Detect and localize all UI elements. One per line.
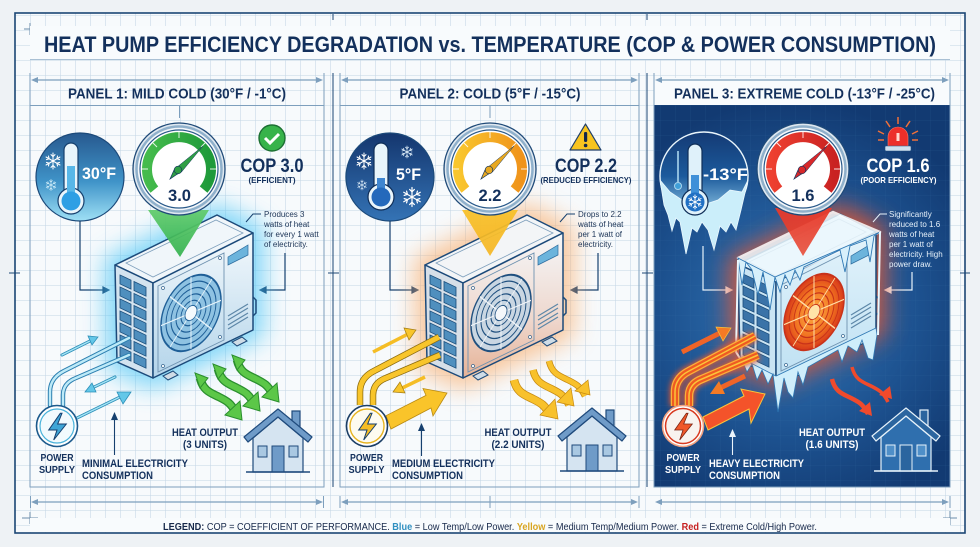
- COP label: COP 2.2: [555, 156, 617, 177]
- note: power draw.: [889, 260, 932, 269]
- consumption label: [392, 423, 496, 482]
- heat output arrows: [195, 355, 279, 420]
- panel 3: extreme cold: [654, 73, 950, 487]
- glow around unit: [115, 215, 253, 378]
- note: Produces 3: [264, 210, 305, 219]
- note: watts of heat: [888, 230, 935, 239]
- gauge 3.0: 3.0: [168, 187, 191, 205]
- panel 2 frame and header: [340, 73, 639, 487]
- bottom dimension lines: [30, 496, 950, 508]
- heat output label: HEAT OUTPUT: [172, 427, 238, 439]
- panel 2: cold: [340, 73, 639, 487]
- gauge beam: [775, 208, 832, 256]
- consumption label: MINIMAL ELECTRICITY: [82, 458, 189, 470]
- note: for every 1 watt: [264, 230, 319, 239]
- icon: house: [558, 408, 626, 471]
- electricity pipes and arrows: [360, 328, 447, 429]
- COP label: (REDUCED EFFICIENCY): [540, 175, 632, 185]
- thermometer badge 30F: 30°F: [82, 165, 116, 183]
- consumption label: HEAVY ELECTRICITY: [709, 458, 805, 470]
- legend: [30, 518, 950, 533]
- consumption label: [82, 412, 189, 482]
- power supply label: [348, 452, 384, 476]
- consumption label: CONSUMPTION: [709, 470, 780, 482]
- thermometer badge 5F: 5°F: [396, 166, 421, 184]
- note: [560, 210, 624, 249]
- power supply icon: [346, 406, 388, 446]
- connector lines to unit: [703, 246, 912, 293]
- icon: warning triangle: [570, 124, 601, 150]
- heat output label: [484, 427, 552, 451]
- consumption label: MEDIUM ELECTRICITY: [392, 458, 496, 470]
- panel 3 background: [654, 73, 950, 487]
- heat output arrows: [832, 367, 892, 416]
- heat output label: HEAT OUTPUT: [799, 427, 865, 439]
- heat output arrows: [514, 361, 590, 419]
- COP label: (EFFICIENT): [248, 175, 296, 185]
- heat output label: [172, 427, 238, 451]
- power supply label: POWER: [666, 452, 700, 464]
- power supply label: SUPPLY: [665, 464, 701, 476]
- power supply label: POWER: [40, 452, 74, 464]
- COP label: (POOR EFFICIENCY): [860, 175, 937, 185]
- power supply label: SUPPLY: [39, 464, 75, 476]
- heat output label: (2.2 UNITS): [492, 439, 545, 451]
- COP label: [860, 156, 937, 185]
- gauge beam: [148, 210, 209, 257]
- power supply icon: [36, 406, 78, 446]
- note: watts of heat: [263, 220, 310, 229]
- thermometer badge 30F: [36, 133, 124, 221]
- glow around unit: [738, 214, 876, 377]
- frozen thermometer badge: [660, 132, 748, 254]
- panel 3 header: PANEL 3: EXTREME COLD (-13°F / -25°C): [674, 86, 935, 102]
- power supply label: [39, 452, 75, 476]
- heat output label: (1.6 UNITS): [806, 439, 859, 451]
- electricity pipes and arrows: [675, 327, 765, 430]
- electricity pipes and arrows: [50, 336, 131, 418]
- icon: check badge: [259, 125, 285, 151]
- consumption label: CONSUMPTION: [82, 470, 153, 482]
- gauge 1.6: 1.6: [792, 187, 814, 205]
- consumption label: CONSUMPTION: [392, 470, 463, 482]
- COP label: COP 3.0: [240, 156, 304, 177]
- gauge 1.6: [757, 123, 849, 215]
- connector lines to unit: [390, 221, 598, 293]
- power supply label: SUPPLY: [348, 464, 384, 476]
- frozen thermometer badge: -13°F: [703, 166, 748, 184]
- frozen outdoor unit: [736, 212, 880, 412]
- outdoor unit: [425, 215, 566, 380]
- COP label: COP 1.6: [866, 156, 930, 177]
- note: reduced to 1.6: [889, 220, 941, 229]
- note: Significantly: [889, 210, 932, 219]
- panel 2 frame and header: PANEL 2: COLD (5°F / -15°C): [400, 86, 581, 102]
- note: electricity. High: [889, 250, 943, 259]
- COP label: [540, 156, 632, 185]
- power supply label: [665, 452, 701, 476]
- connector lines to unit: [80, 221, 285, 293]
- note: [246, 210, 319, 249]
- icon: alarm beacon: [878, 117, 918, 151]
- heat output label: (3 UNITS): [183, 439, 227, 451]
- power supply label: POWER: [350, 452, 383, 464]
- panel 1: mild cold: [30, 73, 324, 487]
- note: of electricity.: [264, 240, 308, 249]
- heat output label: HEAT OUTPUT: [484, 427, 552, 439]
- power supply icon: [662, 406, 704, 446]
- legend: LEGEND: COP = COEFFICIENT OF PERFORMANCE. Blue = Low Temp/Low Power. Yellow = Medium Temp/Medium Power. Red = Extreme Cold/High Power.: [163, 521, 817, 533]
- gauge 2.2: 2.2: [478, 187, 502, 205]
- outdoor unit: [115, 215, 256, 380]
- gauge 3.0: [133, 123, 225, 215]
- note: per 1 watt of: [578, 230, 623, 239]
- note: per 1 watt of: [889, 240, 934, 249]
- gauge 2.2: [444, 123, 536, 215]
- panel 1 frame and header: [30, 73, 324, 487]
- heat output label: [799, 427, 865, 451]
- glow around unit: [425, 215, 563, 378]
- note: [873, 210, 943, 269]
- note: electricity.: [578, 240, 613, 249]
- gauge beam: [462, 210, 518, 256]
- consumption label: [709, 429, 805, 482]
- icon: house: [244, 409, 312, 472]
- note: Drops to 2.2: [578, 210, 622, 219]
- icon: house: [872, 408, 940, 471]
- note: watts of heat: [577, 220, 624, 229]
- thermometer badge 5F: [346, 133, 434, 221]
- panel 1 frame and header: PANEL 1: MILD COLD (30°F / -1°C): [68, 86, 286, 102]
- COP label: [240, 156, 304, 185]
- panel 3 header: [655, 77, 949, 102]
